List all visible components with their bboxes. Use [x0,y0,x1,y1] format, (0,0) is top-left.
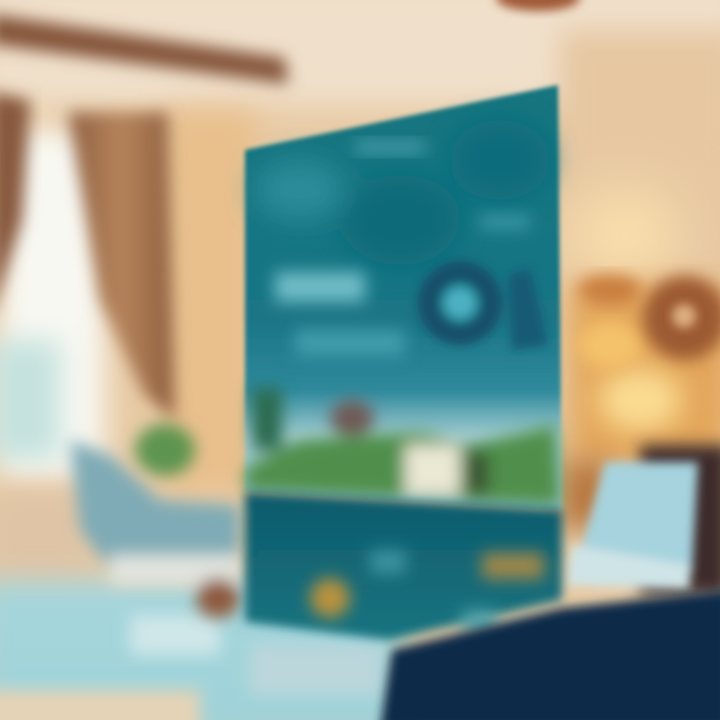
poster icons [310,550,554,652]
ceiling beam [0,14,288,84]
dark sofa [380,590,720,720]
right side lamp and flowers [560,275,720,595]
poster text block highlight [275,215,530,356]
left armchair [70,440,240,618]
poster tonal patches [255,120,550,265]
poster ring chart [428,268,548,350]
plant [135,424,195,476]
poster lower panel [245,492,562,640]
right armchair [566,462,698,590]
floor and rug [0,580,400,720]
poster heading [355,140,425,154]
poster landscape hills [245,388,560,505]
poster [245,85,562,652]
ceiling lamp [496,0,580,11]
poster upper panel [245,85,562,510]
window and curtains [0,92,175,580]
